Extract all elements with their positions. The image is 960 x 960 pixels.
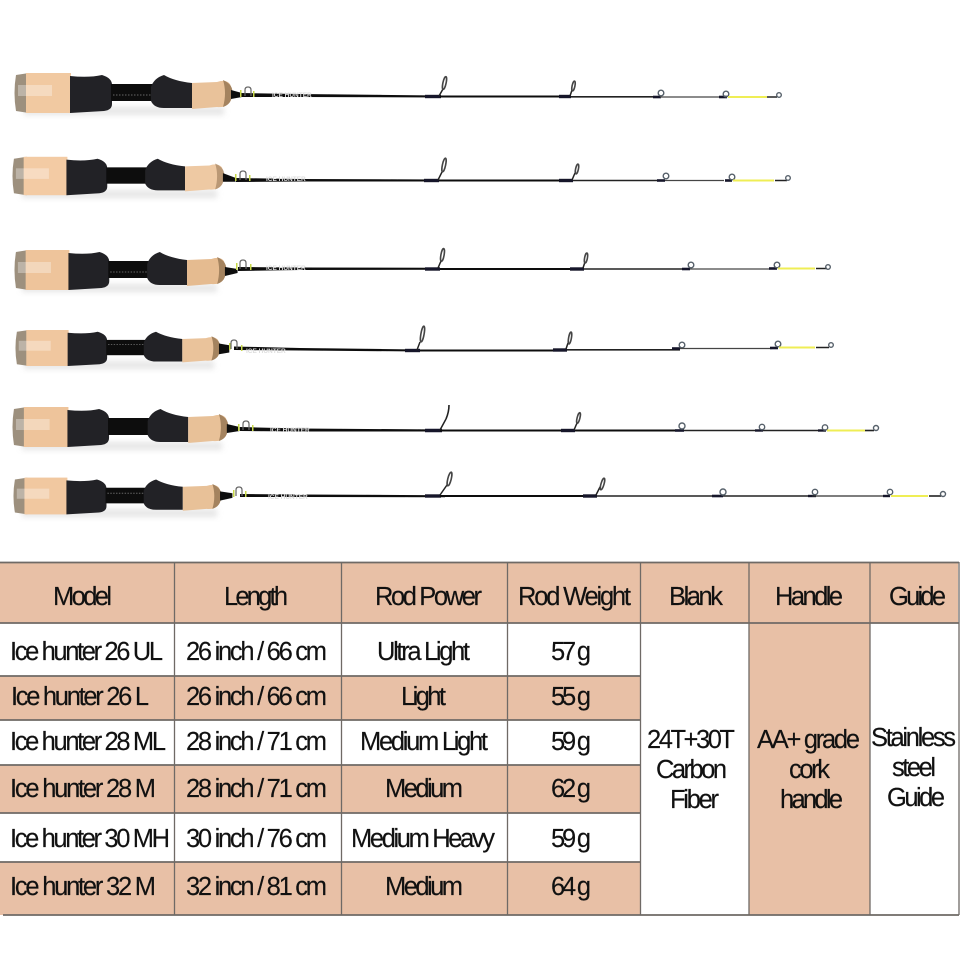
row: Ice hunter 26 L: Ice hunter 26 L [11, 683, 149, 711]
rod 6: Ice hunter 32 M: ICE HUNTER [268, 494, 308, 501]
row: Ice hunter 28 ML: 28 inch / 71 cm [186, 728, 327, 756]
header labels: Rod Weight [518, 583, 631, 611]
row: Ice hunter 28 M: 28 inch / 71 cm [186, 775, 327, 803]
row: Ice hunter 32 M [10, 873, 591, 901]
row: Ice hunter 30 MH [10, 825, 591, 853]
row: Ice hunter 30 MH: 59 g [551, 825, 591, 853]
row: Ice hunter 26 UL: Ice hunter 26 UL [10, 638, 163, 666]
row: Ice hunter 32 M: 64 g [551, 873, 591, 901]
row: Ice hunter 28 ML: Medium Light [360, 728, 488, 756]
row: Ice hunter 26 UL: Ultra Light [377, 638, 470, 666]
merged cell: guide: Guide [887, 784, 945, 812]
rod 2: Ice hunter 26 L [12, 157, 790, 198]
header labels: Guide [889, 583, 946, 611]
row: Ice hunter 30 MH: Medium Heavy [351, 825, 495, 853]
merged cell: handle [757, 726, 860, 814]
row: Ice hunter 30 MH: Ice hunter 30 MH [10, 825, 170, 853]
row: Ice hunter 26 L: Light [401, 683, 446, 711]
rod 1: Ice hunter 26 UL: ICE HUNTER [272, 92, 312, 99]
merged cell: handle: AA+ grade [757, 726, 860, 754]
rod 4: Ice hunter 28 M [15, 326, 833, 369]
row: Ice hunter 28 M: Ice hunter 28 M [10, 775, 156, 803]
row: Ice hunter 26 UL: 26 inch / 66 cm [186, 638, 327, 666]
header labels: Blank [669, 583, 723, 611]
row: Ice hunter 26 L: 26 inch / 66 cm [186, 683, 327, 711]
header labels: Rod Power [375, 583, 482, 611]
merged cell: blank: Fiber [670, 786, 720, 814]
rod 5: Ice hunter 30 MH [12, 405, 879, 450]
row: Ice hunter 28 ML: Ice hunter 28 ML [10, 728, 166, 756]
rod 1: Ice hunter 26 UL [14, 73, 781, 115]
merged cell: guide: Stainless [871, 724, 956, 752]
row: Ice hunter 28 ML: 59 g [551, 728, 591, 756]
rod 6: Ice hunter 32 M [13, 472, 946, 517]
merged cell: handle: handle [780, 786, 843, 814]
specification table [0, 562, 959, 915]
row: Ice hunter 26 L [11, 683, 591, 711]
merged cell: blank: Carbon [656, 756, 727, 784]
row: Ice hunter 32 M: Medium [385, 873, 463, 901]
row: Ice hunter 28 M: 62 g [551, 775, 591, 803]
merged cell: guide: steel [892, 754, 936, 782]
row: Ice hunter 26 UL: 57 g [551, 638, 591, 666]
row: Ice hunter 28 ML [10, 728, 591, 756]
merged cell: handle: cork [789, 756, 830, 784]
merged cell: guide [871, 724, 956, 812]
row: Ice hunter 28 M [10, 775, 591, 803]
row: Ice hunter 32 M: 32 incn / 81 cm [186, 873, 327, 901]
header labels [53, 583, 946, 611]
row: Ice hunter 26 L: 55 g [551, 683, 591, 711]
rod 5: Ice hunter 30 MH: ICE HUNTER [270, 427, 310, 434]
header labels: Length [224, 583, 288, 611]
rod 2: Ice hunter 26 L: ICE HUNTER [266, 176, 306, 183]
header labels: Model [53, 583, 112, 611]
row: Ice hunter 32 M: Ice hunter 32 M [10, 873, 156, 901]
merged cell: blank: 24T+30T [647, 726, 735, 754]
rod 3: Ice hunter 28 ML: ICE HUNTER [266, 265, 306, 272]
merged cell: blank [647, 726, 735, 814]
rod 3: Ice hunter 28 ML [14, 248, 830, 292]
header row background [0, 562, 958, 623]
row: Ice hunter 28 M: Medium [385, 775, 463, 803]
header labels: Handle [775, 583, 843, 611]
row: Ice hunter 26 UL [10, 638, 591, 666]
row: Ice hunter 30 MH: 30 inch / 76 cm [186, 825, 327, 853]
rod 4: Ice hunter 28 M: ICE HUNTER [246, 348, 286, 355]
